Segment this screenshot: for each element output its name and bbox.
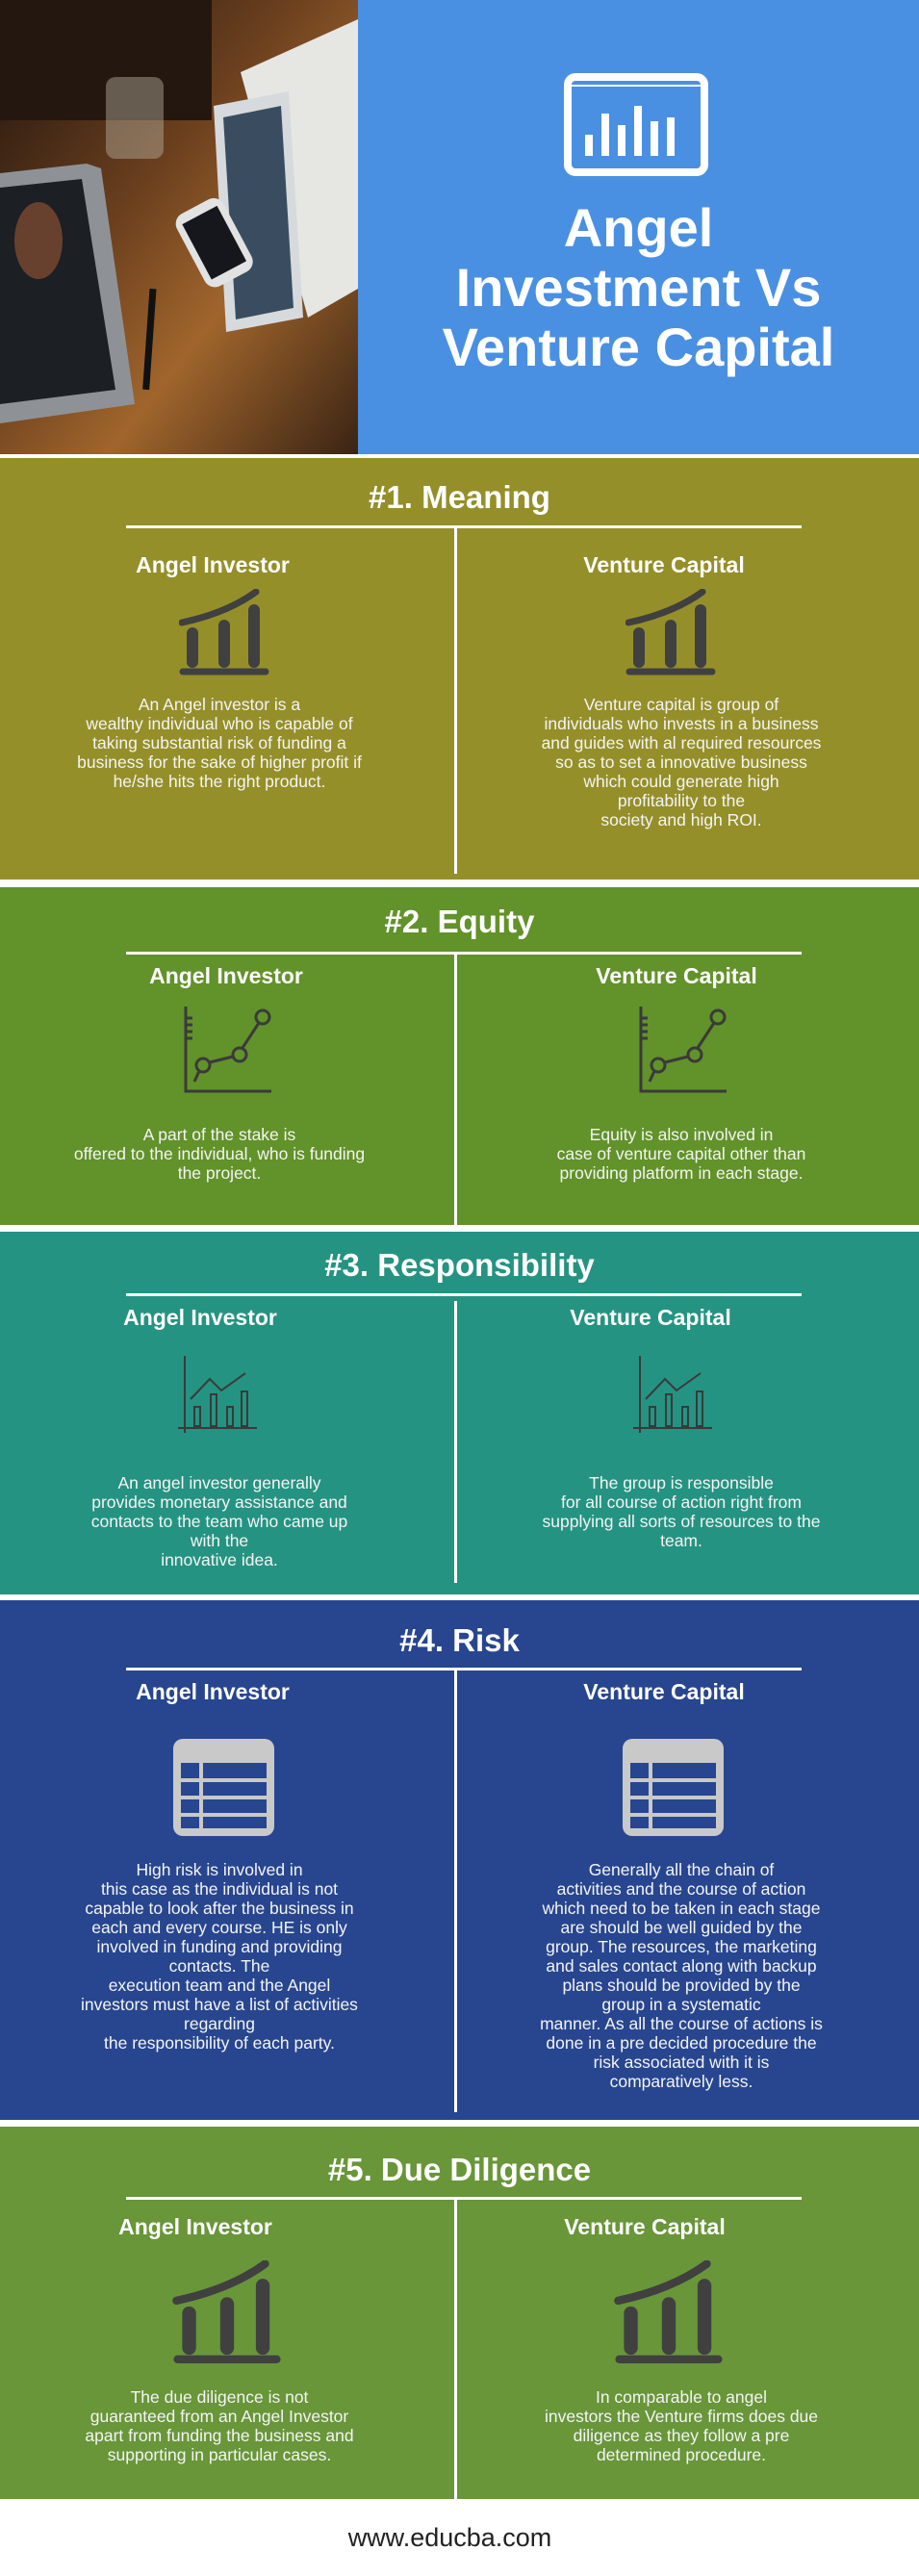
text: vc meaning xyxy=(542,695,821,829)
main title xyxy=(443,197,834,377)
left heading: Angel Investor xyxy=(136,1679,290,1704)
icon: growth bars right xyxy=(625,589,716,676)
text: vc risk: which need to be taken in each stage xyxy=(543,1899,820,1918)
icon: chart screen xyxy=(564,73,708,176)
icon: line chart right xyxy=(639,1007,727,1093)
text: angel risk: investors must have a list of activities xyxy=(81,1995,358,2014)
text: vc due diligence: In comparable to angel xyxy=(596,2387,767,2407)
text: angel meaning: wealthy individual who is capable of xyxy=(86,714,353,733)
text: vc meaning: individuals who invests in a business xyxy=(544,714,819,733)
panel: due diligence xyxy=(0,2127,919,2499)
icon: line chart left xyxy=(185,1007,271,1093)
text: angel meaning: taking substantial risk of funding a xyxy=(92,733,346,752)
text: vc risk: are should be well guided by the xyxy=(560,1918,803,1937)
main title: Angel xyxy=(564,197,713,258)
text: vc due diligence: diligence as they follow a pre xyxy=(574,2426,789,2445)
icon: table left xyxy=(173,1739,274,1836)
icon: growth bars left xyxy=(179,589,269,676)
text: angel risk: this case as the individual is not xyxy=(101,1879,338,1899)
text: angel due diligence: guaranteed from an Angel Investor xyxy=(90,2407,348,2426)
icon: growth bars right xyxy=(614,2260,723,2363)
text: vc responsibility: The group is responsible xyxy=(589,1473,774,1492)
text: vc meaning: which could generate high xyxy=(583,772,779,791)
text: vc risk: comparatively less. xyxy=(610,2072,753,2091)
heading: due diligence: #5. Due Diligence xyxy=(328,2152,591,2187)
text: vc risk: Generally all the chain of xyxy=(589,1860,774,1879)
text: angel risk: High risk is involved in xyxy=(136,1860,303,1879)
text: vc meaning: so as to set a innovative business xyxy=(555,752,807,772)
main title: Venture Capital xyxy=(443,317,834,377)
left heading: Angel Investor xyxy=(123,1305,277,1330)
text: vc risk: and sales contact along with backup xyxy=(546,1956,817,1976)
text: angel responsibility: An angel investor generally xyxy=(117,1473,321,1492)
text: vc due diligence xyxy=(545,2387,818,2464)
text: angel risk: involved in funding and providing xyxy=(97,1937,342,1956)
heading: responsibility: #3. Responsibility xyxy=(324,1247,595,1283)
text: vc responsibility: team. xyxy=(660,1531,702,1550)
text: angel risk: execution team and the Angel xyxy=(109,1976,330,1995)
photo: desk with laptop xyxy=(0,0,358,454)
text: angel equity: the project. xyxy=(178,1163,261,1183)
icon: bar line chart right xyxy=(633,1356,712,1433)
header xyxy=(0,0,919,454)
text: angel meaning: An Angel investor is a xyxy=(139,695,300,714)
text: angel risk: regarding xyxy=(184,2014,255,2033)
left heading: Angel Investor xyxy=(149,963,303,988)
panel: risk xyxy=(0,1600,919,2120)
header blue panel xyxy=(358,0,919,454)
text: vc responsibility: for all course of action right from xyxy=(561,1492,802,1512)
text: vc meaning: Venture capital is group of xyxy=(584,695,779,714)
text: vc responsibility xyxy=(543,1473,820,1550)
right heading: Venture Capital xyxy=(583,552,745,577)
heading: equity: #2. Equity xyxy=(385,904,534,939)
text: angel equity xyxy=(74,1125,365,1183)
text: angel due diligence: The due diligence is not xyxy=(131,2387,308,2407)
panel: equity xyxy=(0,887,919,1225)
footer: website: www.educba.com xyxy=(348,2523,551,2552)
text: vc risk: manner. As all the course of actions is xyxy=(540,2014,823,2033)
text: angel risk: capable to look after the business in xyxy=(85,1899,354,1918)
heading: risk: #4. Risk xyxy=(399,1622,520,1658)
right heading: Venture Capital xyxy=(570,1305,731,1330)
right heading: Venture Capital xyxy=(583,1679,745,1704)
text: vc risk: group in a systematic xyxy=(601,1995,761,2014)
panel: responsibility xyxy=(0,1232,919,1594)
text: angel risk: the responsibility of each party. xyxy=(104,2033,335,2053)
icon: table right xyxy=(623,1739,724,1836)
text: vc risk: group. The resources, the marketing xyxy=(546,1937,817,1956)
text: vc equity xyxy=(557,1125,805,1183)
text: angel risk xyxy=(81,1860,358,2053)
main title: Investment Vs xyxy=(456,257,821,318)
text: vc due diligence: investors the Venture firms does due xyxy=(545,2407,818,2426)
text: vc equity: Equity is also involved in xyxy=(590,1125,773,1144)
text: angel meaning xyxy=(77,695,362,791)
text: angel due diligence: apart from funding the business and xyxy=(85,2426,354,2445)
text: vc responsibility: supplying all sorts of resources to the xyxy=(543,1512,820,1531)
text: vc equity: case of venture capital other than xyxy=(557,1144,805,1163)
text: angel meaning: he/she hits the right product. xyxy=(114,772,325,791)
text: angel risk: contacts. The xyxy=(169,1956,269,1976)
text: vc meaning: society and high ROI. xyxy=(600,810,762,829)
text: angel risk: each and every course. HE is only xyxy=(91,1918,347,1937)
left heading: Angel Investor xyxy=(136,552,290,577)
right heading: Venture Capital xyxy=(596,963,757,988)
text: vc risk xyxy=(540,1860,823,2091)
heading: meaning: #1. Meaning xyxy=(369,479,550,515)
icon: bar line chart left xyxy=(178,1356,257,1433)
text: vc meaning: and guides with al required resources xyxy=(542,733,821,752)
text: angel responsibility: contacts to the team who came up xyxy=(91,1512,347,1531)
text: vc risk: done in a pre decided procedure the xyxy=(546,2033,817,2053)
text: angel due diligence: supporting in particular cases. xyxy=(108,2445,331,2464)
text: vc equity: providing platform in each stage. xyxy=(560,1163,803,1183)
text: angel responsibility: innovative idea. xyxy=(161,1550,278,1569)
icon: growth bars left xyxy=(172,2260,281,2363)
panel: meaning xyxy=(0,458,919,880)
text: vc risk: risk associated with it is xyxy=(594,2053,769,2072)
text: vc risk: plans should be provided by the xyxy=(562,1976,801,1995)
text: angel equity: A part of the stake is xyxy=(143,1125,295,1144)
right heading: Venture Capital xyxy=(564,2214,726,2239)
text: vc due diligence: determined procedure. xyxy=(597,2445,766,2464)
text: angel responsibility xyxy=(91,1473,347,1569)
left heading: Angel Investor xyxy=(118,2214,272,2239)
text: angel responsibility: with the xyxy=(191,1531,248,1550)
text: angel meaning: business for the sake of higher profit if xyxy=(77,752,362,772)
text: angel equity: offered to the individual, who is funding xyxy=(74,1144,365,1163)
text: angel responsibility: provides monetary assistance and xyxy=(91,1492,347,1512)
text: angel due diligence xyxy=(85,2387,354,2464)
text: vc risk: activities and the course of action xyxy=(557,1879,805,1899)
text: vc meaning: profitability to the xyxy=(618,791,745,810)
